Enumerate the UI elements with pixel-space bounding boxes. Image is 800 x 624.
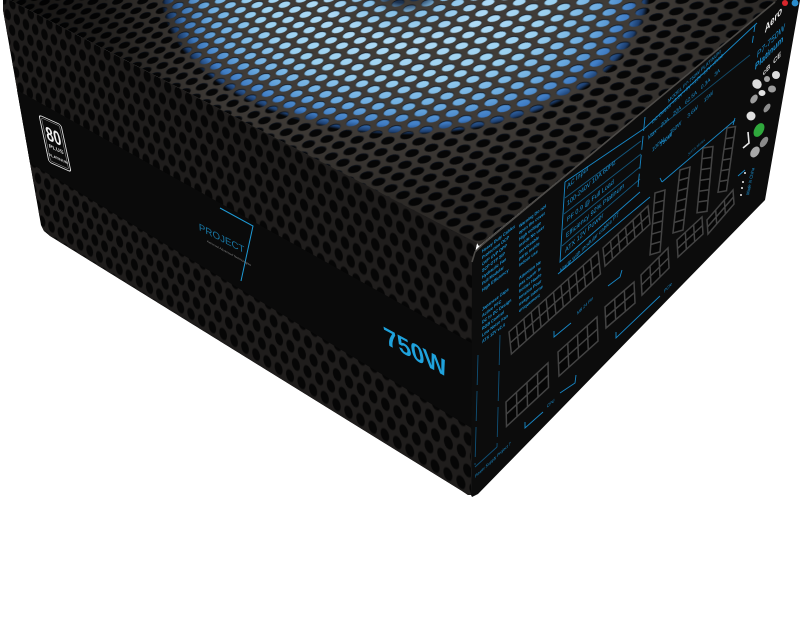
connector: 8-pin center [558,317,598,376]
side face panel [471,0,800,497]
marks row 5 [743,132,770,159]
side top bevel edge [472,2,775,262]
input table row 3: PF 0.9 @ Full Load [567,178,614,224]
blue illuminated fan behind grille [10,0,777,246]
text block: left column: SCP OTP SIP [482,251,505,273]
connector: tall G [650,190,665,255]
top face of power supply with fan grille [3,0,777,495]
text block: left column: DC to DC Design [482,297,511,325]
connector: tall I [697,146,713,213]
label: main: MB 24 Pin [577,295,594,316]
text block: left column: Protection OCP [482,235,509,260]
logo wordmark: PROJECT [199,222,245,256]
certification marks [740,49,781,196]
connector: tall H [673,167,690,233]
text block: second column: Attention Ne [519,259,541,281]
total row: 750W [660,131,672,149]
input table row 5: ATX 12V Power [565,210,604,255]
text block: left column: High Efficiency [482,267,509,293]
80 Plus Platinum badge: PLATINUM [48,152,69,166]
text block: second column: Indoor use [519,248,538,268]
text block: left column: OVP UVP OPP [482,243,507,267]
80 Plus Platinum badge [39,115,71,172]
load row: 100W 750W 3.6W 15W [652,90,713,154]
text block: second column: parts inside [519,240,540,261]
rating table text [648,49,723,154]
text block: left column: Low Noise Fan [482,313,508,338]
connector: 8-pin lower [506,363,548,426]
connector: 6-pin K [677,217,703,257]
side connector diagrams [506,126,736,426]
label: vertical note: Made in China [745,167,756,195]
label: model footer: Power Supply Project 7 [475,440,511,479]
connector: 6-pin F [641,248,669,295]
marks row 2 [750,71,780,91]
brand logo text: Aero [763,4,783,36]
input table rows: AC Input [567,165,588,191]
label: cpu: CPU [547,398,554,409]
input table row 4: Efficiency 92% Platinum [566,182,624,240]
brand logo dots [782,0,798,6]
connector: tall J [718,126,736,192]
text block: left column: Heavy Duty Cables [482,223,515,254]
table footer text: Made with modular cables P7 [560,212,619,275]
text block: left column: Japanese Caps [482,286,509,312]
text block: left column: RGB Control [482,309,504,331]
model name: P7-750W [757,21,786,60]
text block: second column: boitier Haute [519,271,542,294]
green recycling mark [751,121,767,139]
text block: second column: open the cover [519,210,545,235]
text block: second column: pas ouvrir le [519,265,541,287]
top face shading [10,0,776,246]
text block: left column: Hydraulic Fan [482,256,506,280]
text block: second column: High voltage [519,220,541,242]
Project logo [199,208,253,281]
text block: left column: Active PFC [482,298,502,318]
marks row 4 [746,102,772,120]
text block: left column: Full Modular [482,265,504,286]
marks row 3 [749,86,776,105]
input table frame [558,117,650,274]
current row: Max 20A 20A 62.5A 0.3A 3A [648,68,720,142]
black front band [17,90,477,429]
perforated top plate [12,0,777,246]
label: sata: SATA Molex [688,136,706,157]
logo bracket [220,208,253,281]
side left frame [475,335,500,467]
connector: 24-pin [509,252,600,354]
connector: 6-pin L [707,190,734,234]
80 Plus Platinum badge: PLUS [48,144,64,156]
input table row 2: 100-240V 10A 60Hz [567,158,616,208]
dark backing behind front perforation [3,0,477,495]
marks row 1: cB CE [763,49,781,78]
connector: 12-pin [603,206,650,266]
750W wattage label: 750W [381,321,450,384]
text block: left column: ATX 12V v2.4 [482,322,505,344]
text block: second column: usage interne [519,283,543,307]
small white bullets [740,172,746,196]
rating table frame [645,23,757,182]
logo tagline: Aerocool Advanced Technologies [207,239,251,267]
front face of power supply [3,0,479,495]
voltage row: DC Output +3.3V +5V +12V -12V +5Vsb [652,52,723,126]
connector bracket lines [525,170,745,428]
model row: MODEL P7-750W PLATINUM [668,49,721,105]
connector: 6-pin E [605,282,635,328]
platinum name: Platinum [755,34,783,72]
text block: second column: tension Pour [519,278,542,300]
text block: second column: Warning Do not [519,203,547,229]
text block: second column: serviceable [519,234,539,255]
connector labels [475,136,756,479]
label: pcie: PCIe [664,281,672,295]
80 Plus Platinum badge: 80 [44,123,63,151]
text block: second column: uniquement [519,292,540,313]
text block: second column: inside No user [519,224,544,248]
perforated front plate [3,0,477,495]
